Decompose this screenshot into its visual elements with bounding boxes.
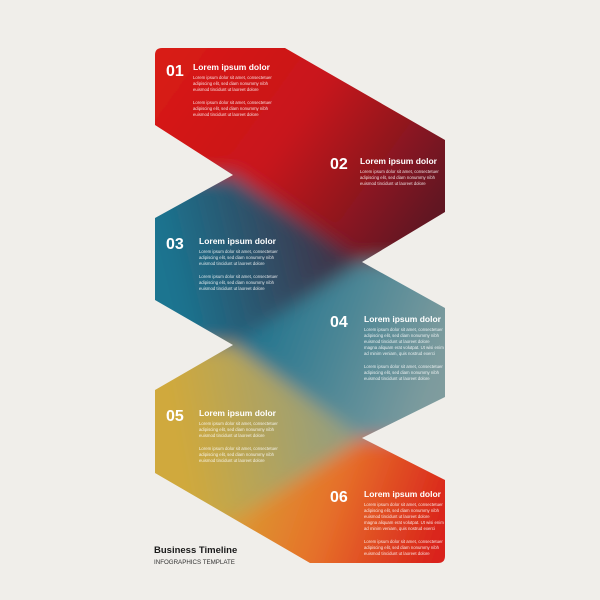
step 04: euismod tincidunt ut laoreet dolore bbox=[364, 339, 430, 344]
step 06: adipiscing elit, sed diam nonummy nibh bbox=[364, 508, 440, 513]
step 01: adipiscing elit, sed diam nonummy nibh bbox=[193, 81, 269, 86]
step 05: euismod tincidunt ut laoreet dolore bbox=[199, 458, 265, 463]
step 03: Lorem ipsum dolor sit amet, consectetuer bbox=[199, 249, 278, 254]
step 04: adipiscing elit, sed diam nonummy nibh bbox=[364, 370, 440, 375]
step 04: Lorem ipsum dolor bbox=[364, 314, 442, 324]
step 01: Lorem ipsum dolor bbox=[193, 62, 271, 72]
step 04: 04 bbox=[330, 314, 348, 331]
step 02: Lorem ipsum dolor sit amet, consectetuer bbox=[360, 169, 439, 174]
step 05 bbox=[166, 408, 278, 463]
step 02: adipiscing elit, sed diam nonummy nibh bbox=[360, 175, 436, 180]
step 03: adipiscing elit, sed diam nonummy nibh bbox=[199, 280, 275, 285]
step 04: Lorem ipsum dolor sit amet, consectetuer bbox=[364, 327, 443, 332]
step 05: Lorem ipsum dolor sit amet, consectetuer bbox=[199, 446, 278, 451]
step 01: Lorem ipsum dolor sit amet, consectetuer bbox=[193, 75, 272, 80]
step 06: euismod tincidunt ut laoreet dolore bbox=[364, 551, 430, 556]
step 02 bbox=[330, 156, 439, 186]
step 05: adipiscing elit, sed diam nonummy nibh bbox=[199, 427, 275, 432]
infographic canvas bbox=[154, 48, 445, 564]
step 04: euismod tincidunt ut laoreet dolore bbox=[364, 376, 430, 381]
step 01: euismod tincidunt ut laoreet dolore bbox=[193, 112, 259, 117]
step 06: Lorem ipsum dolor sit amet, consectetuer bbox=[364, 539, 443, 544]
step 01: Lorem ipsum dolor sit amet, consectetuer bbox=[193, 100, 272, 105]
step 04 bbox=[330, 314, 444, 381]
step 04: adipiscing elit, sed diam nonummy nibh bbox=[364, 333, 440, 338]
step 03: euismod tincidunt ut laoreet dolore bbox=[199, 286, 265, 291]
step 05: adipiscing elit, sed diam nonummy nibh bbox=[199, 452, 275, 457]
step 06: euismod tincidunt ut laoreet dolore bbox=[364, 514, 430, 519]
step 06 bbox=[330, 489, 444, 556]
step 01 bbox=[166, 62, 272, 117]
step 05: Lorem ipsum dolor sit amet, consectetuer bbox=[199, 421, 278, 426]
step 06: adipiscing elit, sed diam nonummy nibh bbox=[364, 545, 440, 550]
step 03: euismod tincidunt ut laoreet dolore bbox=[199, 261, 265, 266]
step 02: euismod tincidunt ut laoreet dolore bbox=[360, 181, 426, 186]
step 04: magna aliquam erat volutpat. Ut wisi enim bbox=[364, 345, 444, 350]
step 05: 05 bbox=[166, 408, 184, 425]
step 01: adipiscing elit, sed diam nonummy nibh bbox=[193, 106, 269, 111]
step 02: Lorem ipsum dolor bbox=[360, 156, 438, 166]
footer title bbox=[154, 545, 237, 566]
step 06: 06 bbox=[330, 489, 348, 506]
step 03: Lorem ipsum dolor bbox=[199, 236, 277, 246]
step 05: euismod tincidunt ut laoreet dolore bbox=[199, 433, 265, 438]
step 06: Lorem ipsum dolor bbox=[364, 489, 442, 499]
step 01: euismod tincidunt ut laoreet dolore bbox=[193, 87, 259, 92]
step 06: magna aliquam erat volutpat. Ut wisi enim bbox=[364, 520, 444, 525]
zigzag ribbon bbox=[155, 48, 445, 563]
footer title: INFOGRAPHICS TEMPLATE bbox=[154, 559, 235, 566]
step 05: Lorem ipsum dolor bbox=[199, 408, 277, 418]
step 03 bbox=[166, 236, 278, 291]
step 03: 03 bbox=[166, 236, 184, 253]
step 03: Lorem ipsum dolor sit amet, consectetuer bbox=[199, 274, 278, 279]
footer title: Business Timeline bbox=[154, 545, 237, 556]
step 06: ad minim veniam, quis nostrud exerci bbox=[364, 526, 435, 531]
step 06: Lorem ipsum dolor sit amet, consectetuer bbox=[364, 502, 443, 507]
step 01: 01 bbox=[166, 63, 184, 80]
step 02: 02 bbox=[330, 156, 348, 173]
step 04: ad minim veniam, quis nostrud exerci bbox=[364, 351, 435, 356]
step 04: Lorem ipsum dolor sit amet, consectetuer bbox=[364, 364, 443, 369]
step 03: adipiscing elit, sed diam nonummy nibh bbox=[199, 255, 275, 260]
